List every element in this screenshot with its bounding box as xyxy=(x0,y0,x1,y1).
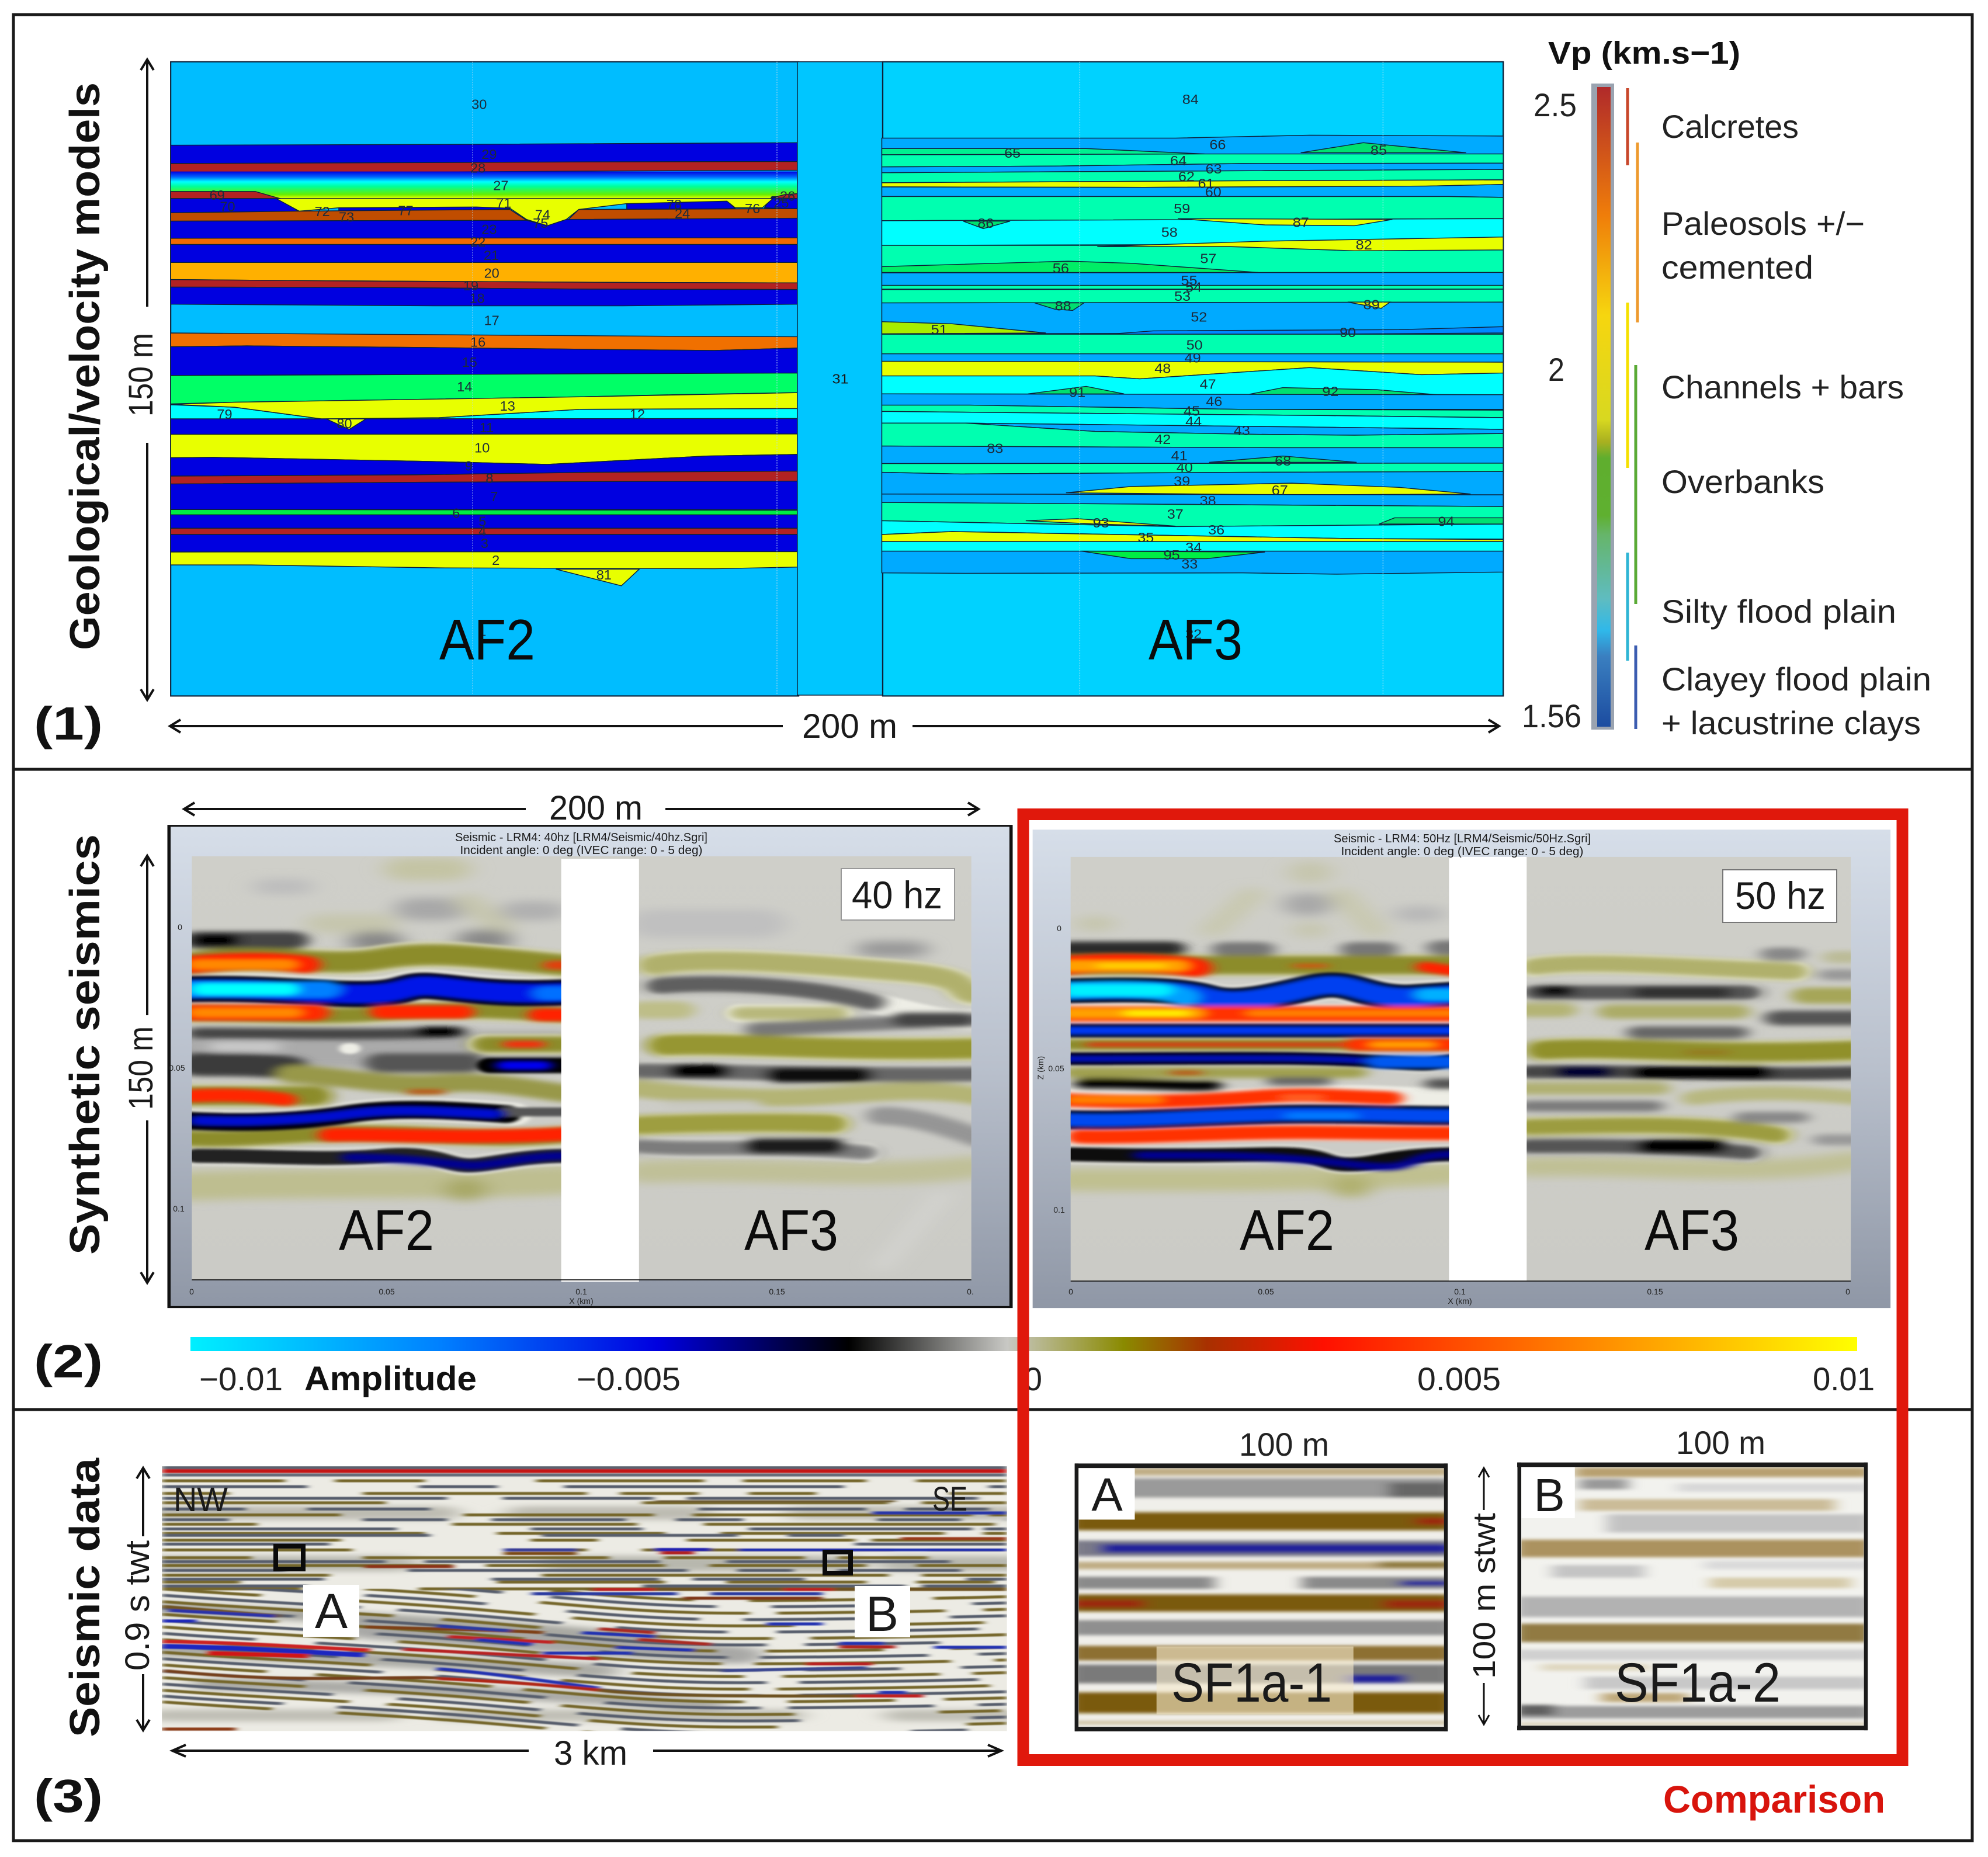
arrow: 3 km scale: 3 km xyxy=(554,1734,627,1772)
chart title 40 hz xyxy=(455,831,707,857)
chart: model AF3: 32 xyxy=(1185,627,1202,642)
chart: model AF2: 29 xyxy=(481,147,497,162)
panel: synthetic seismics xyxy=(34,789,1890,1398)
chart: model AF3 xyxy=(882,62,1503,696)
chart: model AF3: 45 xyxy=(1184,404,1200,419)
chart: seismic section xyxy=(162,1466,1007,1739)
axis ticks 50 hz xyxy=(1036,924,1850,1306)
scale values: 1.56 xyxy=(1522,697,1581,734)
chart: model AF3: 65 xyxy=(1004,146,1021,161)
chart: model AF3: 37 xyxy=(1167,507,1184,522)
chart: model AF2: 3 xyxy=(481,536,488,551)
chart: model AF3: 48 xyxy=(1154,361,1171,376)
chart: model AF2: 22 xyxy=(470,234,485,249)
label: SF1a-2: SF1a-2 xyxy=(1615,1652,1781,1714)
chart: model AF3: 84 xyxy=(1182,92,1199,107)
marker box A xyxy=(276,1546,303,1569)
chart: model AF2: 81 xyxy=(596,567,612,582)
label: 50 hz: 50 hz xyxy=(1735,874,1826,917)
chart: model AF2: 79 xyxy=(217,407,233,422)
chart: model AF3: 86 xyxy=(977,216,994,231)
label: A xyxy=(303,1584,359,1639)
amplitude scale labels: 0 xyxy=(1024,1360,1042,1397)
chart: model AF2: 23 xyxy=(481,222,497,237)
arrow: 150 m vertical scale xyxy=(122,60,160,700)
chart: model AF2: 15 xyxy=(462,355,477,370)
label: SF1a-1: SF1a-1 xyxy=(1171,1652,1332,1714)
label: 100 m A: 100 m xyxy=(1239,1426,1329,1463)
chart: model AF2: 74 xyxy=(535,207,550,223)
chart: model AF3: 83 xyxy=(987,441,1003,457)
axis ticks 40 hz xyxy=(169,922,974,1306)
chart: model AF3: 55 xyxy=(1181,273,1198,289)
lithology labels: Clayey flood plain xyxy=(1661,661,1931,697)
axis ticks 40 hz: X (km) xyxy=(569,1296,594,1306)
arrow: 200 m scale xyxy=(184,789,979,827)
chart: model AF3: 90 xyxy=(1340,325,1356,341)
chart: model AF2: 80 xyxy=(336,416,352,431)
arrow: 150 m scale: 150 m xyxy=(122,1026,160,1110)
chart: model AF2: 30 xyxy=(471,96,487,112)
amplitude scale labels: 0.01 xyxy=(1813,1360,1875,1397)
inset: SF1a-1 xyxy=(1068,1426,1454,1731)
chart: model AF3: 82 xyxy=(1356,238,1372,253)
chart: model AF3: 44 xyxy=(1185,414,1202,429)
axis ticks 40 hz: 0.1 xyxy=(173,1204,185,1213)
arrow: 0.9 s twt scale xyxy=(119,1468,157,1730)
label: AF3 40 hz: AF3 xyxy=(744,1198,838,1262)
chart: model AF3: 36 xyxy=(1208,523,1224,538)
lithology labels: cemented xyxy=(1661,249,1813,286)
axis ticks 40 hz: 0. xyxy=(967,1287,974,1296)
axis ticks 40 hz: 0.05 xyxy=(379,1287,395,1296)
label: AF2: AF2 xyxy=(439,608,535,672)
lithology labels: Silty flood plain xyxy=(1661,593,1896,630)
chart: model AF3: 50 xyxy=(1186,338,1203,353)
amplitude scale labels: −0.005 xyxy=(577,1360,681,1397)
chart: model AF3: 58 xyxy=(1161,225,1178,241)
amplitude colour bar xyxy=(190,1337,1857,1351)
chart title 40 hz: Seismic - LRM4: 40hz [LRM4/Seismic/40hz.Sgri] xyxy=(455,831,707,844)
axis ticks 50 hz: 0.05 xyxy=(1258,1287,1274,1296)
arrow: 150 m vertical scale: 150 m xyxy=(122,333,160,416)
axis ticks 50 hz: 0 xyxy=(1068,1287,1073,1296)
label: 100 m B: 100 m xyxy=(1676,1424,1765,1461)
chart: model AF3: 42 xyxy=(1154,432,1171,447)
chart: connector block 31 xyxy=(797,62,883,695)
label: 40 hz: 40 hz xyxy=(852,873,942,917)
amplitude scale labels: −0.01 xyxy=(199,1360,283,1397)
lithology labels: Paleosols +/− xyxy=(1661,205,1865,242)
axis ticks 40 hz: 0.15 xyxy=(769,1287,785,1296)
callout: comparison frame xyxy=(1024,814,1902,1760)
chart: model AF3: 52 xyxy=(1191,310,1207,325)
chart: model AF2: 76 xyxy=(745,201,760,216)
chart: model AF2: 26 xyxy=(780,189,795,204)
label: B inset: B xyxy=(1533,1469,1565,1521)
chart: model AF2: 7 xyxy=(490,489,498,504)
chart: model AF2: 18 xyxy=(470,291,485,306)
scale values xyxy=(1522,86,1581,734)
label: SE: SE xyxy=(932,1480,967,1518)
lithology range bars xyxy=(1628,88,1637,729)
chart: model AF2: 16 xyxy=(470,335,485,350)
chart: model AF2: 5 xyxy=(478,514,486,529)
chart: model AF3: 53 xyxy=(1174,289,1191,304)
chart: model AF3: 91 xyxy=(1069,385,1085,400)
chart: model AF3: 54 xyxy=(1185,280,1202,295)
arrow: 100 m stwt scale xyxy=(1467,1468,1502,1724)
chart: model AF3: 64 xyxy=(1170,154,1186,169)
chart: model AF3: 67 xyxy=(1272,483,1288,498)
chart: model AF3: 38 xyxy=(1200,494,1216,509)
chart title 40 hz: Incident angle: 0 deg (IVEC range: 0 - 5 deg) xyxy=(460,844,702,857)
panel number 3: (3) xyxy=(34,1770,103,1822)
colour ramp xyxy=(1591,84,1614,730)
arrow: 150 m scale xyxy=(122,856,160,1283)
axis ticks 40 hz: 0 xyxy=(178,922,182,932)
chart: model AF3: 39 xyxy=(1174,474,1190,489)
chart: model AF3: 87 xyxy=(1293,215,1309,230)
axis ticks 50 hz: 0.1 xyxy=(1053,1205,1065,1214)
chart: model AF2: 78 xyxy=(667,197,682,212)
chart: model AF2: 28 xyxy=(470,161,485,176)
chart: model AF3: 94 xyxy=(1438,514,1455,530)
legend: Vp scale and lithologies xyxy=(1522,36,1931,741)
chart: model AF2: 12 xyxy=(630,407,645,422)
callout label: comparison: Comparison xyxy=(1663,1778,1885,1821)
legend title: Vp (km.s−1) xyxy=(1548,36,1740,71)
chart: model AF3: 56 xyxy=(1053,261,1069,276)
scale values: 2 xyxy=(1548,351,1564,388)
chart: model AF3: 41 xyxy=(1171,449,1188,464)
amplitude scale labels: 0.005 xyxy=(1417,1360,1501,1397)
label: B: B xyxy=(866,1587,898,1641)
chart: model AF3: 59 xyxy=(1174,202,1190,217)
arrow: 0.9 s twt scale: 0.9 s twt xyxy=(119,1540,157,1671)
heading: geological velocity models: Geological/velocity models xyxy=(62,82,109,650)
chart: model AF3: 89 xyxy=(1364,297,1380,313)
chart: model AF2: 21 xyxy=(484,248,499,263)
lithology labels: + lacustrine clays xyxy=(1661,704,1921,741)
arrow: 100 m stwt scale: 100 m stwt xyxy=(1467,1513,1502,1679)
chart title 50 hz: Seismic - LRM4: 50Hz [LRM4/Seismic/50Hz.Sgri] xyxy=(1334,832,1591,845)
label: AF3 50 hz: AF3 xyxy=(1644,1198,1739,1262)
inset: SF1a-2 xyxy=(1514,1424,1873,1730)
chart: model AF2: 73 xyxy=(339,209,354,224)
chart: model AF3: 63 xyxy=(1206,162,1222,177)
chart: model AF3: 40 xyxy=(1177,460,1193,475)
axis ticks 40 hz: 0.1 xyxy=(575,1287,587,1296)
chart: synthetic seismic 50 hz xyxy=(1033,829,1890,1308)
label: AF2 50 hz: AF2 xyxy=(1240,1198,1334,1262)
lithology labels: Channels + bars xyxy=(1661,369,1904,405)
panel number 1: (1) xyxy=(34,697,103,749)
arrow: 3 km scale xyxy=(172,1734,1001,1772)
axis ticks 50 hz: 0 xyxy=(1057,924,1061,933)
chart: model AF2: 11 xyxy=(480,420,494,435)
chart: model AF2 xyxy=(171,62,800,696)
chart: model AF3: 34 xyxy=(1185,540,1202,556)
label: A inset: A xyxy=(1091,1469,1123,1521)
lithology labels: Overbanks xyxy=(1661,463,1824,500)
heading: synthetic seismics: Synthetic seismics xyxy=(62,834,109,1255)
chart: model AF3: 60 xyxy=(1205,185,1222,200)
chart: model AF2: 6 xyxy=(452,505,460,520)
label: AF3: AF3 xyxy=(1149,608,1243,672)
axis ticks 50 hz: X (km) xyxy=(1448,1296,1472,1306)
chart: model AF2: 77 xyxy=(398,203,414,218)
chart: model AF2: 70 xyxy=(220,199,235,214)
chart: model AF2: 25 xyxy=(773,196,789,211)
chart: model AF2: 9 xyxy=(465,459,473,474)
label: B xyxy=(855,1586,910,1641)
axis ticks 50 hz: 0.15 xyxy=(1647,1287,1663,1296)
lithology labels xyxy=(1661,108,1931,741)
chart: synthetic seismic 40 hz xyxy=(169,826,1011,1307)
chart: model AF3: 46 xyxy=(1206,394,1222,409)
chart: model AF2: 71 xyxy=(496,196,512,211)
label: 40 hz xyxy=(841,869,955,920)
chart: model AF3: 88 xyxy=(1055,298,1071,314)
chart title 50 hz xyxy=(1334,832,1591,858)
chart: model AF2: 19 xyxy=(463,278,478,293)
axis ticks 50 hz: 0 xyxy=(1845,1287,1850,1296)
marker box B xyxy=(825,1552,851,1573)
axis ticks 50 hz: 0.05 xyxy=(1048,1064,1064,1073)
amplitude scale labels: Amplitude xyxy=(304,1360,477,1398)
chart: model AF3: 93 xyxy=(1093,516,1109,531)
chart: model AF2: 27 xyxy=(493,178,509,193)
panel number 2: (2) xyxy=(34,1335,103,1387)
chart: model AF2: 2 xyxy=(492,553,499,568)
inset image A xyxy=(1068,1463,1454,1731)
arrow: 200 m scale: 200 m xyxy=(549,789,643,827)
chart: model AF3: 43 xyxy=(1234,424,1250,439)
heading: seismic data: Seismic data xyxy=(62,1457,109,1737)
chart: model AF2: 4 xyxy=(478,523,486,539)
chart: model AF3: 85 xyxy=(1371,143,1387,158)
chart: model AF3: 35 xyxy=(1137,530,1154,546)
label: A: A xyxy=(315,1584,348,1639)
amplitude scale labels xyxy=(199,1360,1875,1398)
chart: model AF3: 57 xyxy=(1200,251,1216,267)
chart: model AF2: 14 xyxy=(457,379,472,394)
chart: model AF2: 24 xyxy=(675,206,690,221)
axis ticks 50 hz: Z (km) xyxy=(1036,1056,1045,1080)
label: 50 hz xyxy=(1723,870,1837,922)
inset image B xyxy=(1514,1463,1873,1730)
panel: seismic data xyxy=(34,1424,1873,1822)
label: NW: NW xyxy=(174,1481,228,1519)
chart: model AF2: 13 xyxy=(500,398,515,414)
chart: model AF2: 1 xyxy=(478,624,486,639)
chart: model AF3: 95 xyxy=(1164,548,1180,563)
chart: model AF3: 92 xyxy=(1322,384,1338,400)
chart: model AF2: 10 xyxy=(474,440,490,455)
chart: model AF3: 47 xyxy=(1200,377,1216,393)
panel: geological velocity models xyxy=(34,36,1931,749)
chart: model AF2: 75 xyxy=(533,216,548,231)
chart: model AF2: 8 xyxy=(485,471,494,486)
lithology labels: Calcretes xyxy=(1661,108,1799,145)
chart: model AF3: 49 xyxy=(1185,350,1201,366)
chart: model AF3: 66 xyxy=(1209,137,1226,153)
chart: model AF3: 33 xyxy=(1181,557,1198,572)
chart: model AF2: 69 xyxy=(210,188,225,203)
label: AF2 40 hz: AF2 xyxy=(339,1198,434,1262)
chart: model AF3: 62 xyxy=(1178,169,1195,185)
scale values: 2.5 xyxy=(1533,86,1577,123)
chart: model AF2: 72 xyxy=(315,204,330,219)
chart: model AF2: 17 xyxy=(484,313,499,328)
axis ticks 50 hz: 0.1 xyxy=(1454,1287,1466,1296)
axis ticks 40 hz: 0.05 xyxy=(169,1063,185,1072)
arrow: 200 m horizontal scale xyxy=(170,707,1499,745)
chart: model AF3: 68 xyxy=(1275,454,1291,469)
chart: model AF2: 20 xyxy=(484,266,499,281)
chart: model AF3: 61 xyxy=(1198,176,1215,192)
chart: model AF3: 51 xyxy=(931,322,948,338)
axis ticks 40 hz: 0 xyxy=(189,1287,194,1296)
chart: connector block 31: 31 xyxy=(832,372,849,387)
chart title 50 hz: Incident angle: 0 deg (IVEC range: 0 - 5 deg) xyxy=(1341,845,1583,858)
arrow: 200 m horizontal scale: 200 m xyxy=(802,707,897,745)
